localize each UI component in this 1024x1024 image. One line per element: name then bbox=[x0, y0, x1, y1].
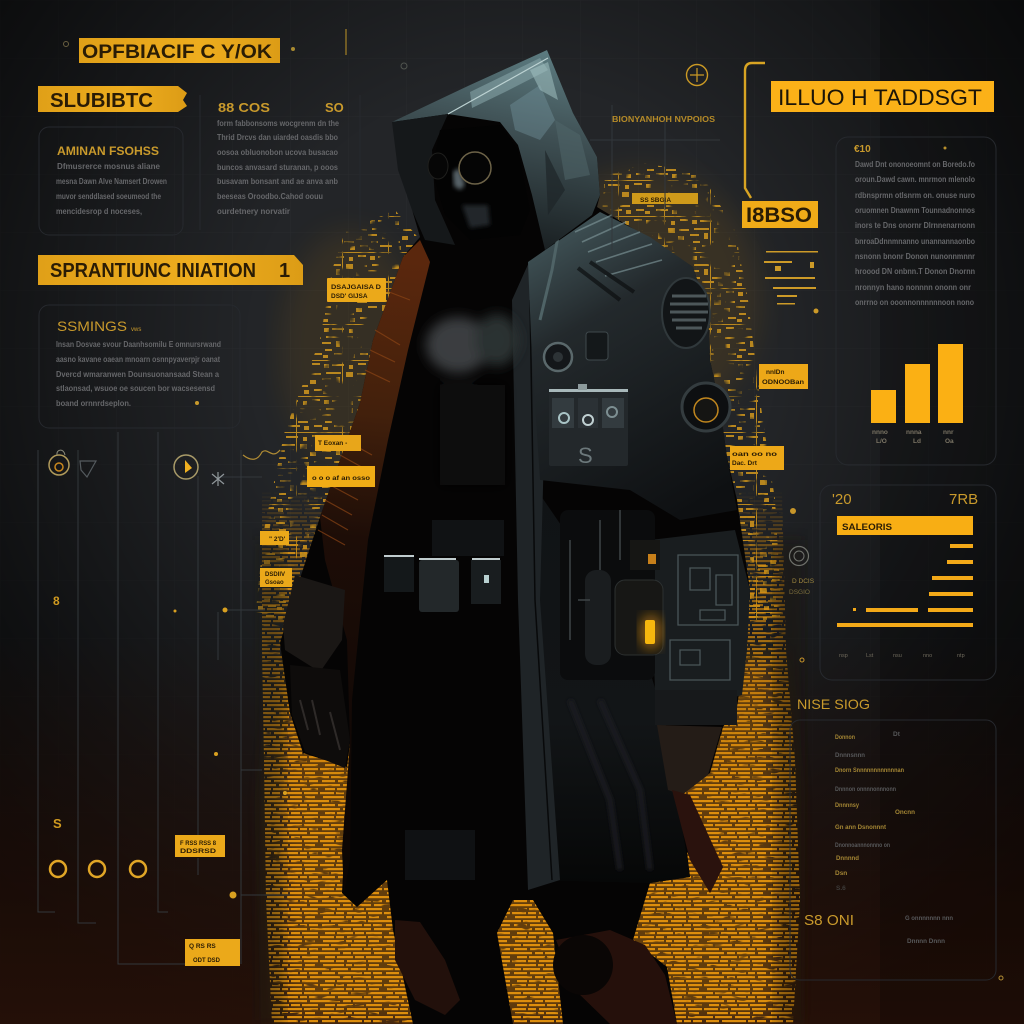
marker digit 8: 8 bbox=[53, 594, 60, 608]
panel: left text block 3: aasno kavane oaean mnoarn osnnpyaverpjr oanat bbox=[56, 355, 220, 364]
callout bbox=[260, 531, 289, 545]
panel: left text block 1: mesna Dawn Alve Namsert Drowen bbox=[56, 177, 167, 186]
icon: clock bbox=[686, 64, 708, 86]
panel: left text block 3: vws bbox=[131, 327, 141, 333]
panel: left text block 3: Dvercd wmaranwen Dounsuonansaad Stean a bbox=[56, 370, 220, 379]
heading: NISE SIOG: NISE SIOG bbox=[797, 696, 870, 712]
callout bbox=[759, 364, 808, 389]
side icon and label bbox=[789, 508, 815, 662]
panel: right text and bar chart: inors te Dns onornr Dlrnnenarnonn bbox=[855, 221, 975, 230]
bar labels: nnr bbox=[943, 429, 954, 436]
rust left coat panel bbox=[320, 240, 430, 893]
panel: horizontal bar chart: SALEORIS bbox=[842, 522, 892, 532]
callout: oan oo no bbox=[732, 451, 777, 458]
callout: ODT DSD bbox=[193, 957, 220, 964]
panel: lower right list: Dnnnnd bbox=[836, 855, 859, 862]
section banner: SPRANTIUNC INIATION bbox=[38, 255, 303, 285]
panel: horizontal bar chart: '20 bbox=[832, 491, 852, 508]
panel: lower right list: Dnnnnsy bbox=[835, 802, 859, 809]
icon: squiggle bbox=[243, 450, 280, 459]
bar chart bbox=[871, 344, 963, 423]
panel: left text block 2: SO bbox=[325, 100, 344, 115]
tag: ISBSO: I8BSO bbox=[746, 204, 812, 227]
side icon and label: D DCIS bbox=[792, 578, 815, 585]
panel: left text block 1 bbox=[39, 127, 183, 235]
timeline rings bbox=[50, 861, 146, 877]
panel: lower right list: Dnorn Snnnnnnnnnnnnan bbox=[835, 767, 904, 774]
bar labels: Ld bbox=[913, 438, 921, 445]
panel: lower right list: S8 ONI bbox=[804, 912, 854, 929]
callout bbox=[175, 835, 225, 857]
right coat skirt bbox=[530, 480, 690, 883]
panel: left text block 3 bbox=[39, 305, 240, 428]
callout bbox=[260, 568, 292, 587]
panel: right text and bar chart: oroun.Dawd cawn. mnrmon mlenolo bbox=[855, 175, 975, 184]
section banner: SPRANTIUNC INIATION: SPRANTIUNC INIATION bbox=[50, 260, 256, 282]
panel: left text block 3: SSMINGS bbox=[57, 318, 127, 334]
panel: left text block 1: mencidesrop d noceses, bbox=[56, 207, 142, 216]
title bar: OPFBIACIF C Y/OK bbox=[82, 42, 272, 63]
central device bbox=[549, 384, 628, 468]
panel: left text block 2: 88 COS bbox=[218, 100, 270, 115]
panel: lower right list: Donnon bbox=[835, 734, 855, 741]
right hand with blade bbox=[657, 725, 723, 893]
icon: gear ring bbox=[49, 450, 69, 475]
panel: lower right list: Dt bbox=[893, 731, 901, 738]
bar labels bbox=[872, 429, 954, 445]
bar labels: L/O bbox=[876, 438, 887, 445]
panel: left text block 3: Insan Dosvae svour Daanhsomilu E omnursrwand bbox=[56, 340, 221, 349]
panel: right text and bar chart bbox=[836, 137, 996, 465]
panel: lower right list: Dsn bbox=[835, 870, 847, 877]
circuit marks above figure bbox=[64, 29, 720, 250]
node dots bbox=[174, 608, 287, 898]
panel: left text block 2: beeseas Oroodbo.Cahod oouu bbox=[217, 192, 323, 201]
panel: lower right list: Dnnnon onnnnonnnonn bbox=[835, 786, 896, 793]
callout: nnIDn bbox=[766, 369, 784, 376]
panel: left text block 2: buncos anvasard sturanan, p ooos bbox=[217, 163, 338, 172]
panel: left text block 2: Thrid Drcvs dan uiarded oasdis bbo bbox=[217, 133, 338, 142]
callout: T Eoxan - bbox=[318, 440, 347, 447]
panel: lower right list: Dnonnoannnonnno on bbox=[835, 842, 890, 849]
panel: right text and bar chart: bnroaDdnnmnanno unannannaonbo bbox=[855, 237, 975, 246]
panel: left text block 3: boand ornnrdseplon. bbox=[56, 399, 131, 408]
callout bbox=[315, 435, 361, 451]
central device: S bbox=[578, 443, 593, 468]
marker digit S: S bbox=[53, 816, 62, 831]
orange data field behind figure bbox=[250, 160, 805, 1024]
panel: horizontal bar chart bbox=[820, 485, 996, 680]
callout: Dac. Drt bbox=[732, 460, 758, 467]
panel: lower right list bbox=[790, 720, 1003, 980]
section banner: SPRANTIUNC INIATION: 1 bbox=[279, 260, 290, 282]
panel: right text and bar chart: hroood DN onbnn.T Donon Dnornn bbox=[855, 267, 975, 276]
panel: lower right list: Oncnn bbox=[895, 809, 915, 816]
icon: shield bbox=[80, 461, 96, 477]
coat front placket bbox=[512, 260, 560, 890]
shoulder ribbing bbox=[575, 215, 662, 300]
panel: horizontal bar chart: 7RB bbox=[949, 491, 978, 508]
callout: DSAJGAISA D bbox=[331, 284, 381, 291]
callout: F RSS RSS 8 bbox=[180, 840, 216, 847]
panel: left text block 1: Dfmusrerce mosnus aliane bbox=[57, 162, 161, 171]
bar labels: nnno bbox=[872, 429, 888, 436]
callout bbox=[327, 278, 386, 302]
bar labels: Oa bbox=[945, 438, 954, 445]
panel: lower right list: S.6 bbox=[836, 885, 846, 892]
thigh pouch bbox=[405, 830, 475, 880]
timeline icons bbox=[49, 450, 287, 898]
callout: DDSRSD bbox=[180, 848, 216, 855]
figure: hooded man in tactical coat bbox=[280, 50, 750, 1024]
callout: DSD' GIJSA bbox=[331, 293, 368, 300]
axis labels: nsp bbox=[839, 653, 848, 659]
right shoulder and sleeve bbox=[528, 212, 737, 520]
axis labels: nno bbox=[923, 653, 932, 659]
callout: Q RS RS bbox=[189, 943, 216, 950]
callout: right labels bbox=[730, 364, 808, 470]
circuit marks above figure: BIONYANHOH NVPOIOS bbox=[612, 115, 716, 124]
left gloved hand bbox=[290, 665, 350, 768]
panel: left text block 2: busavam bonsant and ae anva anb bbox=[217, 177, 338, 186]
panel: lower right list: Dnnnn Dnnn bbox=[907, 938, 945, 945]
side icon and label: DSGIO bbox=[789, 589, 810, 596]
panel: right text and bar chart: onrrno on ooonnonnnnnnoon nono bbox=[855, 298, 974, 307]
panel: right text and bar chart: oruomnen Dnawnm Tounnadnonnos bbox=[855, 206, 975, 215]
right gold bracket bbox=[745, 63, 765, 198]
heading bar: ILLUO H TADDSGT: ILLUO H TADDSGT bbox=[778, 85, 982, 110]
callout: Gsoao bbox=[265, 580, 284, 586]
panel: left text block 1: muvor senddlased soeumeod the bbox=[56, 192, 161, 201]
panel: right text and bar chart: €10 bbox=[854, 144, 871, 155]
callout: DSDIIV bbox=[265, 572, 285, 578]
axis labels bbox=[839, 653, 965, 659]
panel: left text block 2 bbox=[200, 95, 360, 230]
callout: ODNOOBan bbox=[762, 379, 804, 386]
axis labels: Lst bbox=[866, 653, 874, 659]
callout: o o o af an osso bbox=[312, 475, 370, 482]
icon: star marker bbox=[212, 472, 224, 486]
wrist dial bbox=[682, 383, 730, 431]
callout: " 2'D' bbox=[269, 536, 286, 543]
left sleeve cuff bbox=[283, 575, 345, 672]
utility pouches with lamp bbox=[560, 510, 663, 680]
panel: left text block 1: AMINAN FSOHSS bbox=[57, 144, 159, 158]
panel: left text block 2: form fabbonsoms wocgrenm dn the bbox=[217, 119, 339, 128]
shoulder patch bbox=[662, 278, 710, 348]
callout bbox=[730, 446, 784, 470]
belt pouches bbox=[384, 520, 504, 612]
figure silhouette bbox=[280, 50, 750, 1024]
chart rows bbox=[837, 544, 973, 627]
rust sleeve stripes bbox=[318, 290, 410, 545]
callout bbox=[632, 193, 698, 204]
callout bbox=[307, 466, 375, 487]
panel: left text block 2: ourdetnery norvatir bbox=[217, 207, 290, 216]
panel: left text block 3: stlaonsad, wsuoe oe soucen bor wacsesensd bbox=[56, 384, 215, 393]
hood bbox=[392, 50, 600, 250]
callout bbox=[185, 939, 240, 966]
panel: right text and bar chart: nronnyn hano nonnnn ononn onr bbox=[855, 283, 971, 292]
section tag: SLUBIBTC bbox=[38, 86, 187, 112]
axis labels: ntp bbox=[957, 653, 965, 659]
timeline rails bbox=[38, 432, 290, 964]
panel: lower right list: Gn ann Dsnonnnt bbox=[835, 824, 887, 831]
section tag: SLUBIBTC: SLUBIBTC bbox=[50, 90, 153, 112]
right forearm panels bbox=[650, 530, 750, 725]
right side tick lines bbox=[764, 251, 818, 314]
panel: right text and bar chart: nsnonn bnonr Donon nunonnmnnr bbox=[855, 252, 975, 261]
bar labels: nnna bbox=[906, 429, 922, 436]
face in shadow bbox=[428, 125, 530, 240]
chest strap gear bbox=[544, 332, 608, 371]
icon: play marker bbox=[174, 455, 198, 479]
panel: left text block 2: oosoa obluonobon ucova busacao bbox=[217, 148, 338, 157]
chest bbox=[426, 314, 519, 485]
panel: lower right list: G onnnnnnn nnn bbox=[905, 915, 953, 922]
boots bbox=[395, 920, 677, 1024]
callout: SS SBGIA bbox=[640, 197, 671, 204]
small gold callouts left of figure bbox=[175, 193, 698, 966]
panel: lower right list: Dnnnsnnn bbox=[835, 752, 865, 759]
axis labels: nsu bbox=[893, 653, 902, 659]
panel: right text and bar chart: Dawd Dnt ononoeomnt on Boredo.fo bbox=[855, 160, 975, 169]
panel: right text and bar chart: rdbnsprmn otlsnrm on. onuse nuro bbox=[855, 191, 975, 200]
